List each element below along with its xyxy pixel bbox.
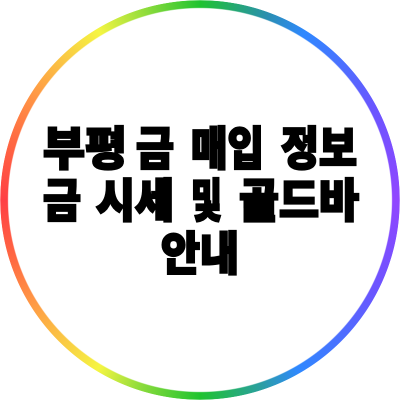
title: 부평 (43, 123, 127, 175)
title: 골드바 (239, 175, 359, 227)
title: 시세 (96, 175, 174, 227)
title: 금 (136, 123, 174, 175)
title: 금 (43, 175, 81, 227)
title: 및 (191, 175, 222, 227)
title: 정보 (281, 123, 357, 175)
title: 매입 (191, 123, 264, 175)
title: 안내 (161, 228, 239, 280)
